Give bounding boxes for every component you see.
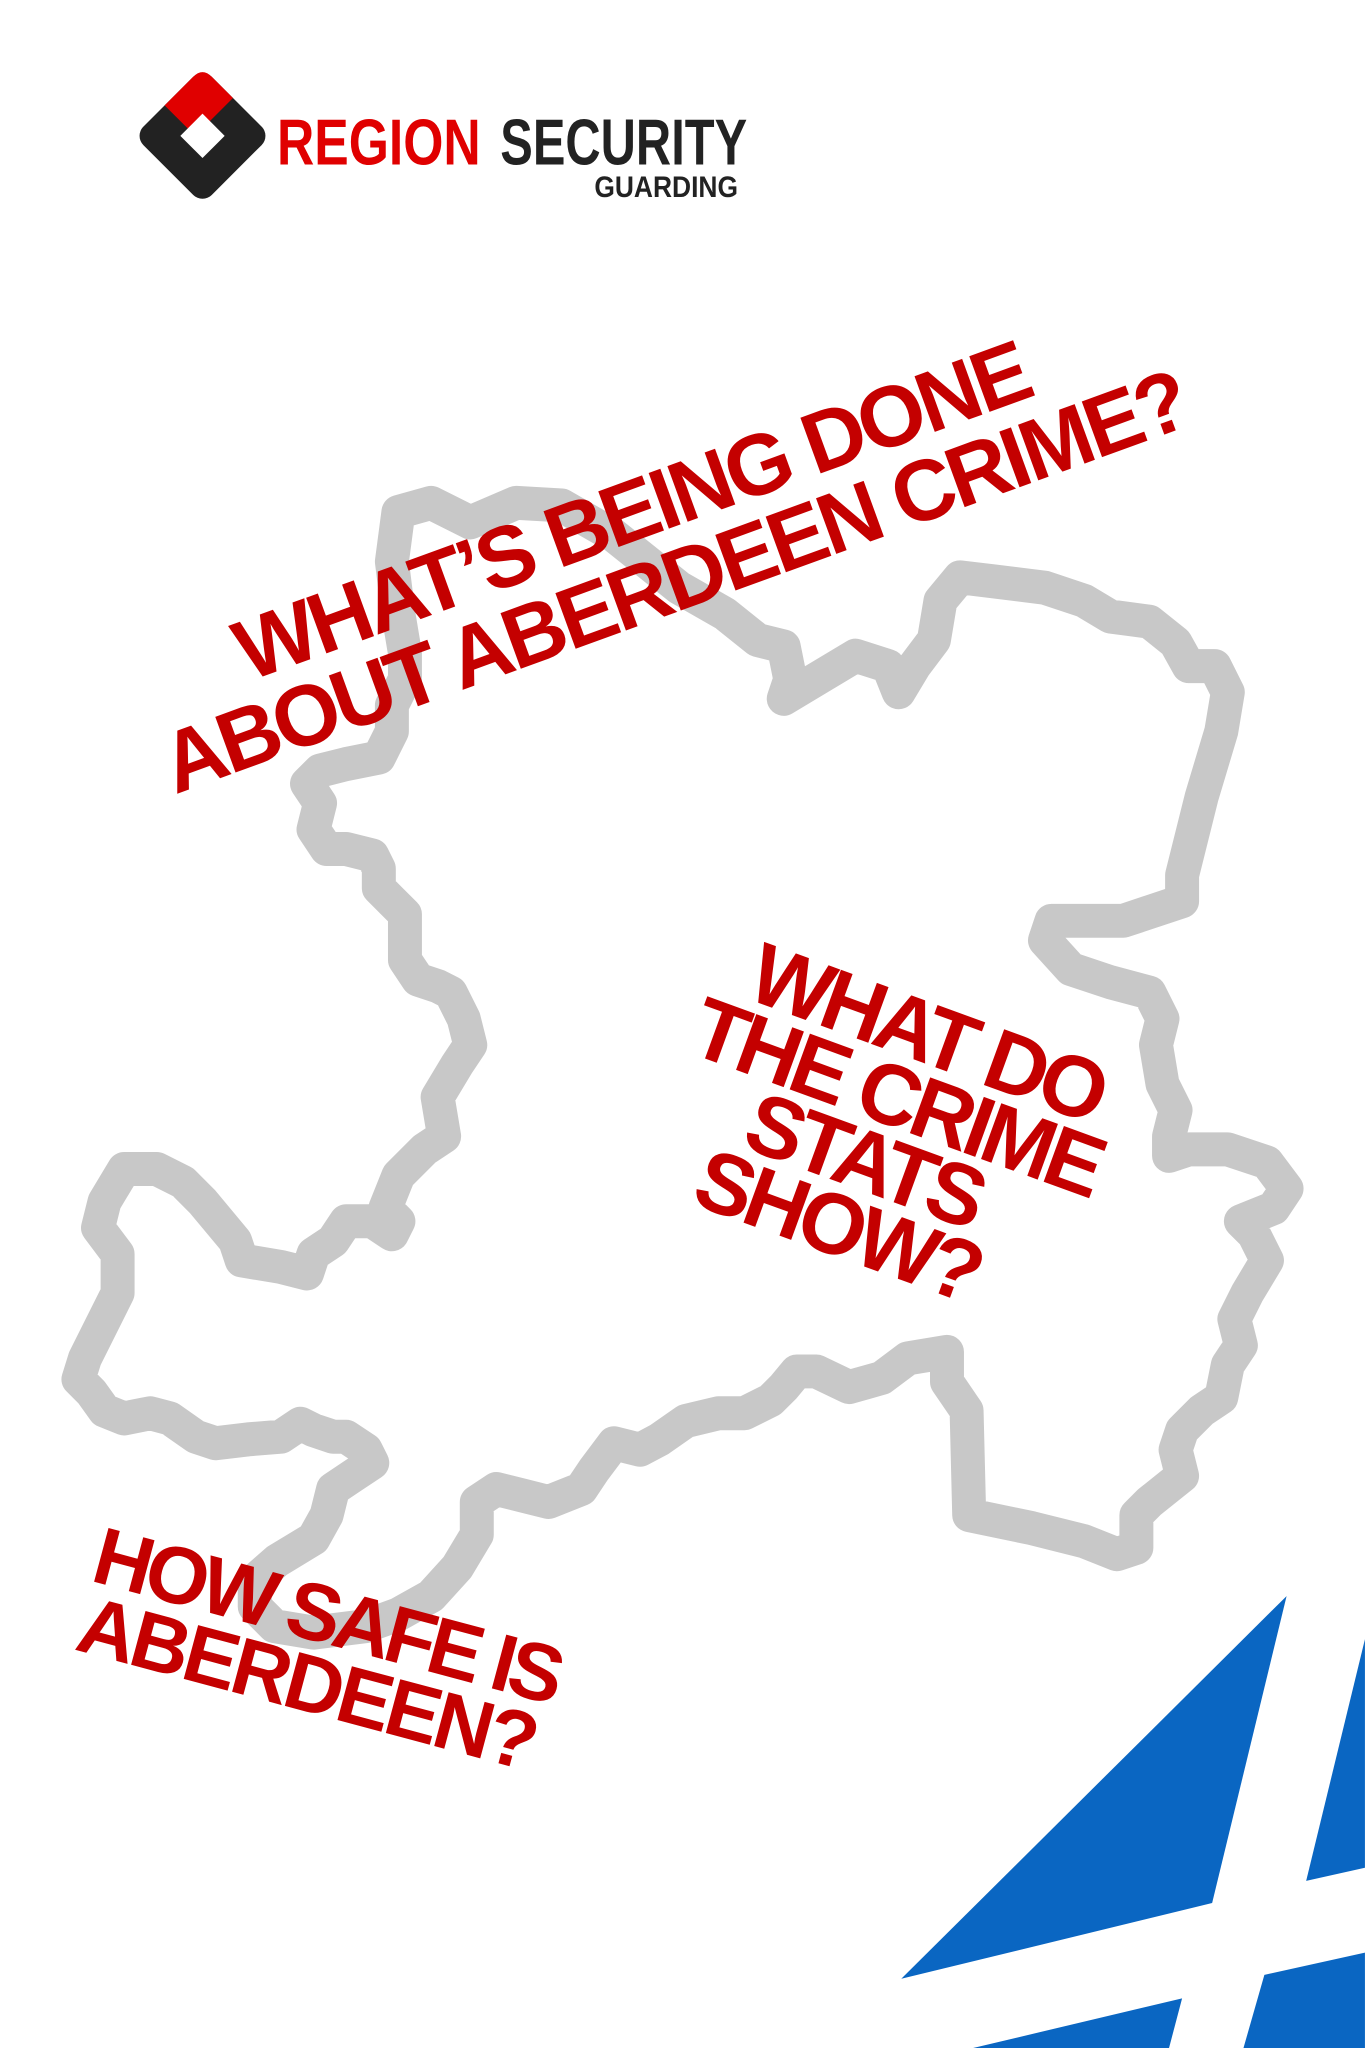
logo text: SECURITY: SECURITY	[500, 106, 747, 179]
heading: what's being done: ABOUT ABERDEEN CRIME?	[149, 352, 1199, 812]
heading: what do the crime stats show: STATS	[733, 1074, 997, 1248]
heading: how safe is aberdeen: HOW SAFE IS	[84, 1511, 571, 1722]
heading: what's being done: WHAT’S BEING DONE	[222, 323, 1042, 700]
heading: what do the crime stats show: THE CRIME	[680, 979, 1116, 1216]
logo text: GUARDING: GUARDING	[594, 171, 738, 204]
logo text: REGION: REGION	[277, 106, 481, 179]
icon: diamond	[134, 67, 271, 204]
heading: how safe is aberdeen: ABERDEEN?	[68, 1580, 544, 1788]
map outline: Aberdeen	[78, 503, 1287, 1633]
heading: what do the crime stats show	[631, 913, 1140, 1349]
heading: what do the crime stats show: WHAT DO	[737, 925, 1119, 1142]
heading: what do the crime stats show: SHOW?	[682, 1130, 993, 1322]
logo	[134, 67, 747, 204]
flag: saltire corner	[901, 1596, 1365, 2048]
